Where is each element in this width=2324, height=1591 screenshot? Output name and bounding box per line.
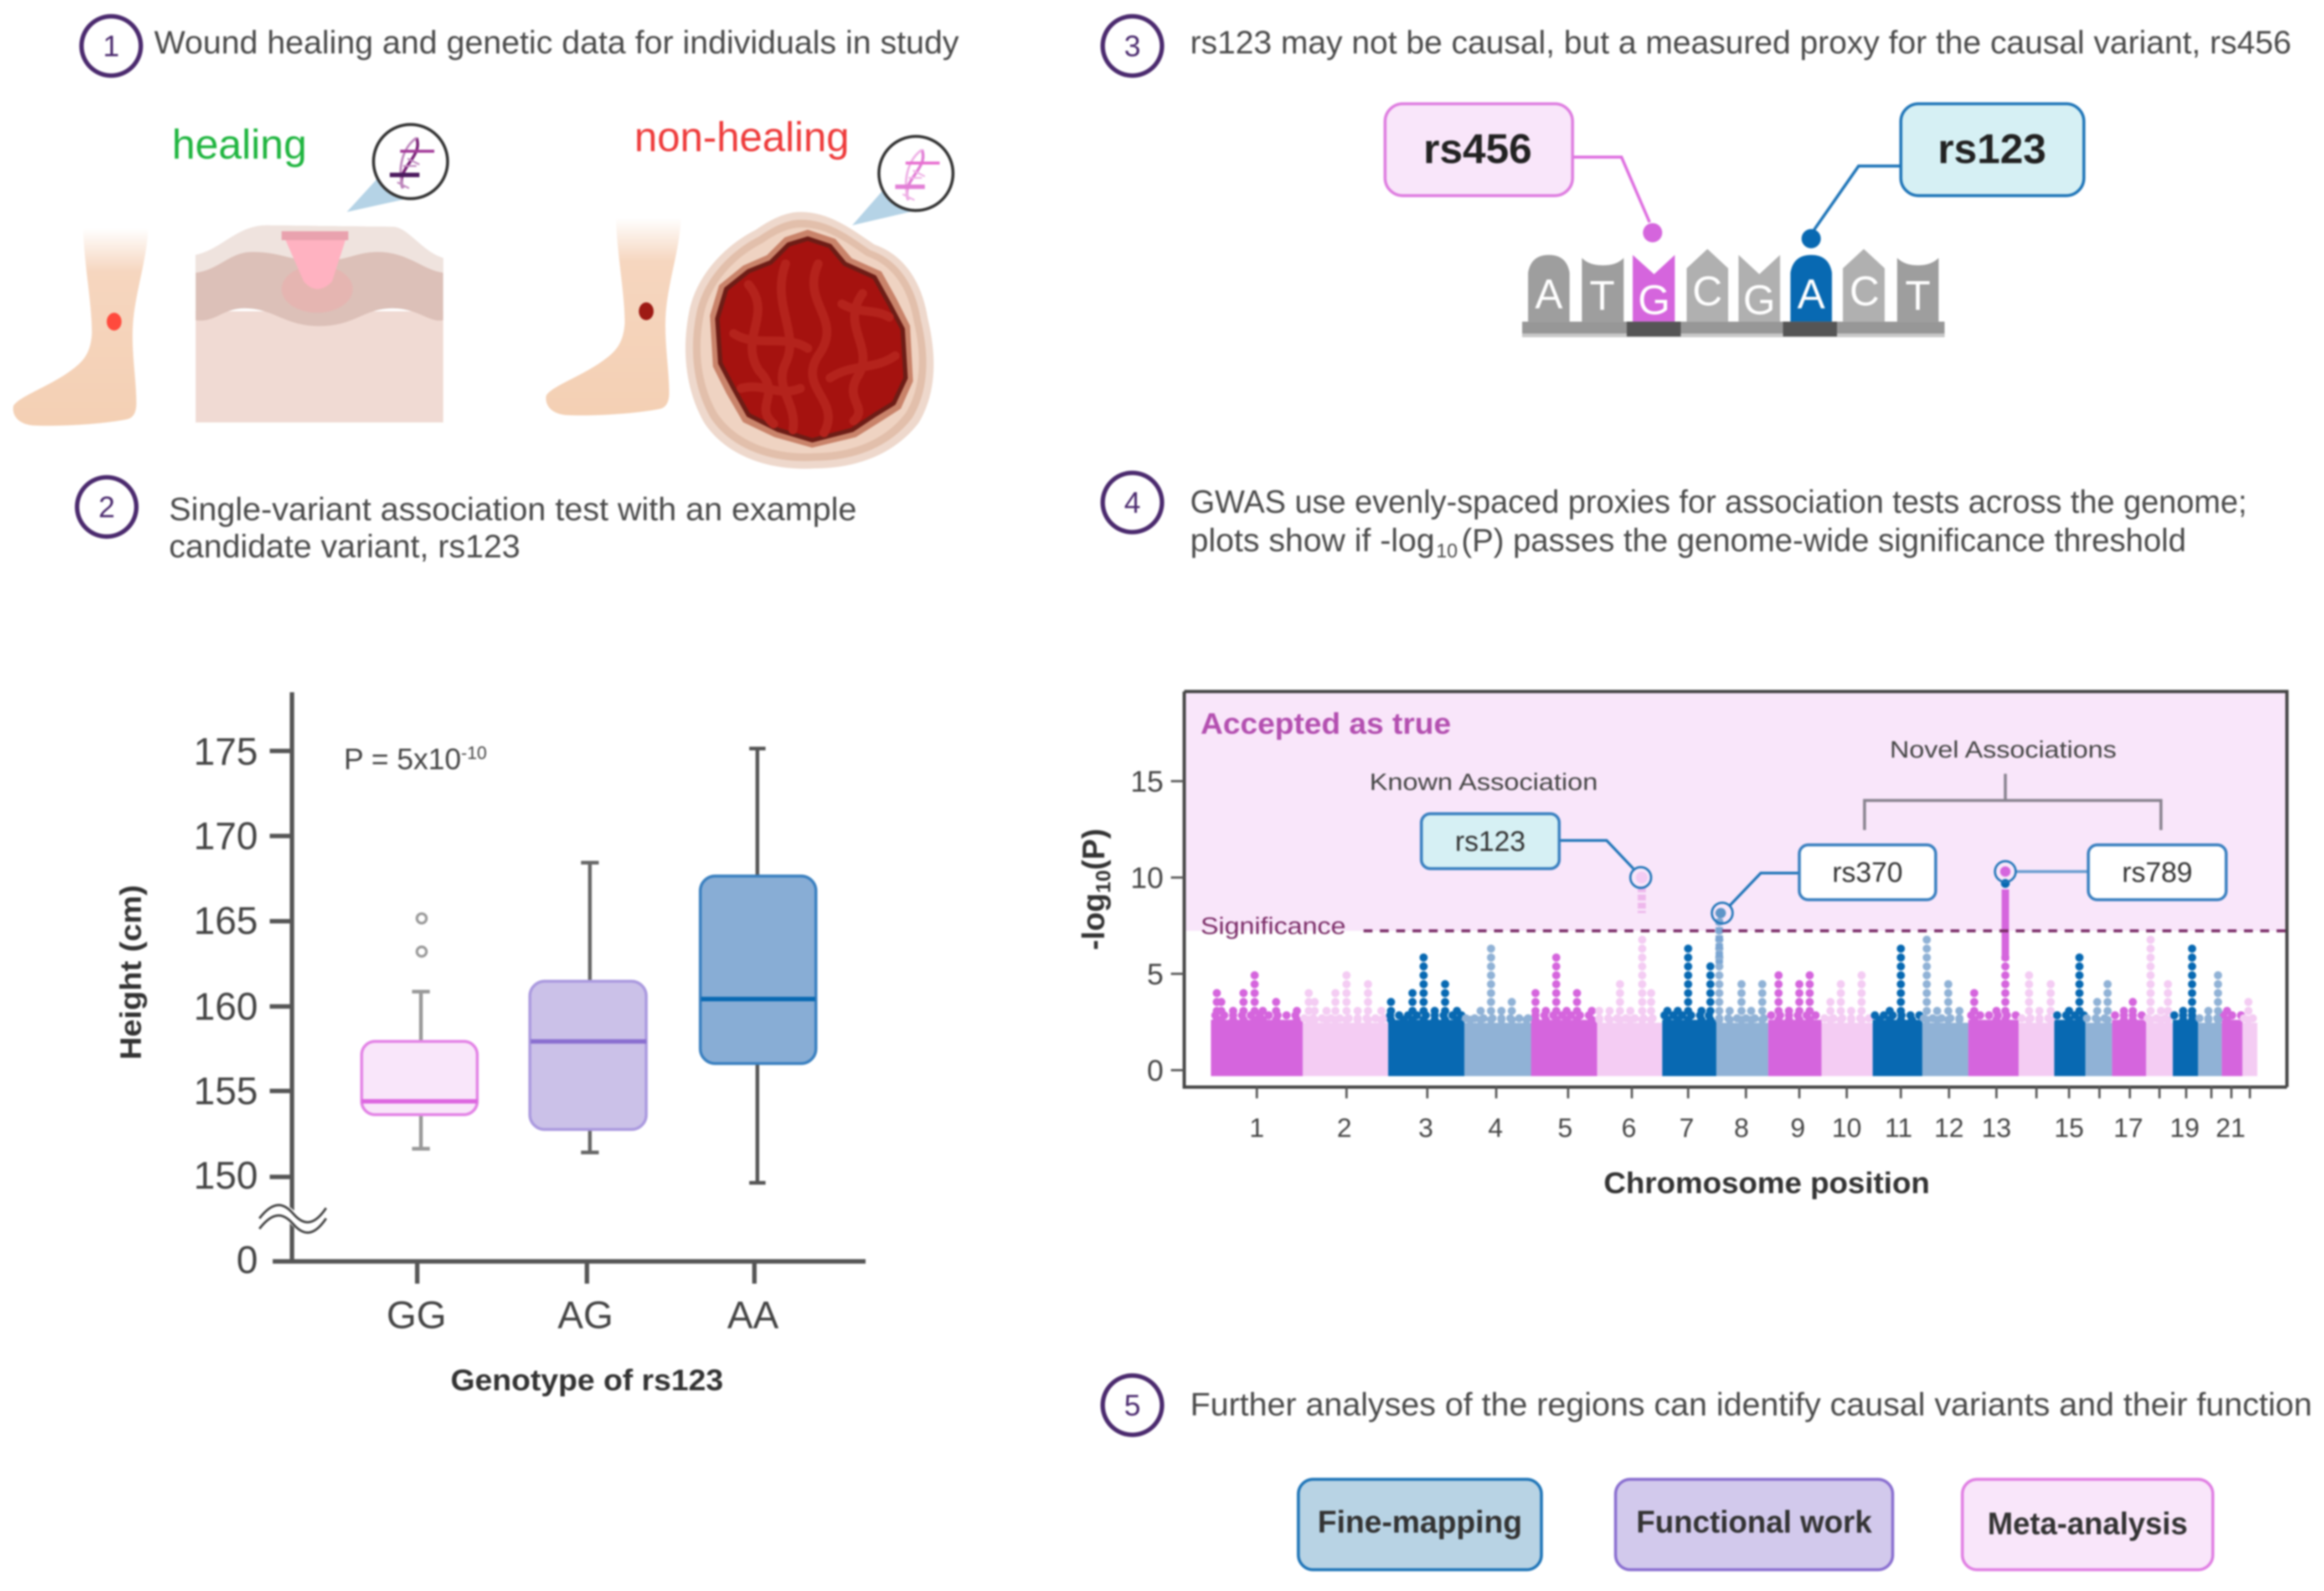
step 4 heading [1102,473,2247,562]
y axis ticks and labels: 10 [1131,862,1163,894]
box: meta-analysis [1962,1479,2213,1570]
DNA sequence: A [1797,271,1825,317]
association dots: pale pink chromosomes [1304,933,2258,1020]
label: non-healing: non-healing [635,114,849,160]
chromosome labels: 21 [2216,1113,2245,1143]
significance threshold [1364,930,2287,931]
significance region [1184,692,2287,931]
DNA sequence: G [1743,276,1775,323]
callout: rs123 [1801,104,2084,248]
bracket: novel associations [1864,774,2161,830]
y tick labels [194,730,258,1281]
DNA sequence: T [1590,272,1615,318]
x tick labels: AG [558,1293,614,1336]
chromosome labels: 15 [2054,1113,2084,1143]
panel: healing wound [13,121,447,426]
y tick labels: 170 [194,815,258,858]
y axis title: (P) [1076,828,1111,870]
DNA sequence: T [1905,272,1930,318]
chromosome labels: 7 [1679,1113,1694,1143]
step 4 heading: GWAS use evenly-spaced proxies for association tests across the genome; [1190,484,2247,520]
step 3 heading: rs123 may not be causal, but a measured proxy for the causal variant, rs456 [1190,24,2291,60]
DNA sequence: G [1638,276,1670,323]
significant peak dots [1636,866,2011,1020]
Manhattan plot [1076,692,2287,1200]
step 5 heading [1102,1376,2312,1435]
x tick labels: GG [387,1293,446,1336]
step 4 heading: 10 [1436,540,1457,562]
callout: rs370: rs370 [1832,857,1903,888]
label: healing: healing [172,121,307,167]
icon: healing skin cross-section [195,225,443,423]
chromosome labels: 6 [1621,1113,1636,1143]
step 2 heading: Single-variant association test with an example [169,492,857,528]
chromosome labels: 11 [1885,1113,1913,1143]
callout: rs456: rs456 [1424,125,1532,172]
chromosome blocks [1211,1020,2258,1076]
y tick labels: 165 [194,899,258,942]
step 1 heading: Wound healing and genetic data for individuals in study [154,24,959,60]
box AA [700,749,816,1183]
panel: causal variant and proxy [1385,104,2084,337]
x axis ticks [1257,1087,2250,1098]
y axis ticks and labels: 0 [1147,1054,1163,1087]
callout: rs789: rs789 [2122,857,2192,888]
chromosome labels: 19 [2170,1113,2199,1143]
y axis ticks and labels: 5 [1147,958,1163,991]
label: known association: Known Association [1369,769,1598,796]
DNA sequence [1522,249,1945,337]
chromosome labels: 4 [1488,1113,1503,1143]
y axis title: -log [1076,893,1111,950]
chromosome labels: 9 [1790,1113,1805,1143]
chromosome labels: 5 [1558,1113,1573,1143]
step 5 heading: Further analyses of the regions can identify causal variants and their function [1190,1387,2312,1423]
y axis title: Height (cm) [115,885,147,1060]
chromosome labels [1249,1113,2245,1143]
p value: -10 [461,743,487,763]
step 1 heading: 1 [103,30,120,63]
callout: rs456 [1385,104,1662,243]
chromosome labels: 13 [1982,1113,2011,1143]
icon: leg with non-healing wound [546,218,681,415]
y axis title: 10 [1091,870,1115,893]
y axis ticks and labels: 15 [1131,765,1163,798]
x axis [273,1262,865,1284]
plot frame [1184,692,2287,1087]
y axis ticks and labels [1131,765,1184,1087]
DNA sequence: A [1535,271,1563,317]
callout: rs123: rs123 [1937,125,2046,172]
y tick labels: 155 [194,1069,258,1113]
box plot: height by genotype [115,692,865,1397]
step 4 heading: plots show if -log [1190,523,1435,559]
label: accepted as true: Accepted as true [1200,708,1451,740]
step 4 heading: 4 [1124,487,1141,519]
box GG [362,914,477,1149]
chromosome labels: 10 [1832,1113,1862,1143]
step 1 heading [81,16,959,76]
x axis title: Genotype of rs123 [451,1365,723,1397]
chromosome labels: 1 [1249,1113,1264,1143]
label: novel associations: Novel Associations [1890,737,2116,763]
step 2 heading: 2 [99,491,115,524]
step 5 heading: 5 [1124,1389,1141,1422]
box: functional work [1616,1479,1893,1570]
chromosome labels: 12 [1934,1113,1964,1143]
icon: leg with healing wound [13,228,148,426]
step 3 heading: 3 [1124,30,1141,63]
x axis title: Chromosome position [1604,1167,1930,1200]
chromosome labels: 2 [1337,1113,1352,1143]
x tick labels [387,1293,779,1336]
y axis [270,692,292,1262]
x tick labels: AA [727,1293,779,1336]
icon: DNA callout healing [347,125,447,212]
chromosome labels: 8 [1734,1113,1749,1143]
icon: chronic wound [686,212,934,468]
box: fine-mapping: Fine-mapping [1318,1505,1522,1539]
association dots: light-blue chromosomes [1466,912,2222,1020]
callout: rs123 [1421,813,1651,888]
callout: rs789 [1995,845,2226,900]
step 2 heading: candidate variant, rs123 [169,528,521,564]
panel: non-healing wound [546,114,953,468]
icon: DNA callout non-healing [852,136,953,225]
callout: rs370 [1712,845,1936,924]
callout: rs123: rs123 [1455,825,1526,857]
box: fine-mapping [1298,1479,1542,1570]
y tick labels: 175 [194,730,258,773]
y tick labels: 0 [236,1238,258,1281]
step 4 heading: (P) passes the genome-wide significance threshold [1461,523,2186,559]
chromosome labels: 3 [1419,1113,1433,1143]
DNA sequence: C [1849,267,1879,314]
step 2 heading [77,477,857,564]
box: meta-analysis: Meta-analysis [1987,1506,2188,1541]
step 3 heading [1102,16,2291,76]
DNA sequence: C [1692,267,1723,314]
chromosome labels: 17 [2114,1113,2143,1143]
box: functional work: Functional work [1636,1505,1872,1539]
p value: P = 5x10 [344,743,461,776]
association dots: blue chromosomes [1390,941,2198,1020]
axis break [259,1205,326,1233]
y tick labels: 150 [194,1154,258,1197]
label: significance: Significance [1200,913,1346,939]
y tick labels: 160 [194,985,258,1028]
association dots: magenta chromosomes [1215,955,2243,1020]
box AG [530,863,646,1152]
